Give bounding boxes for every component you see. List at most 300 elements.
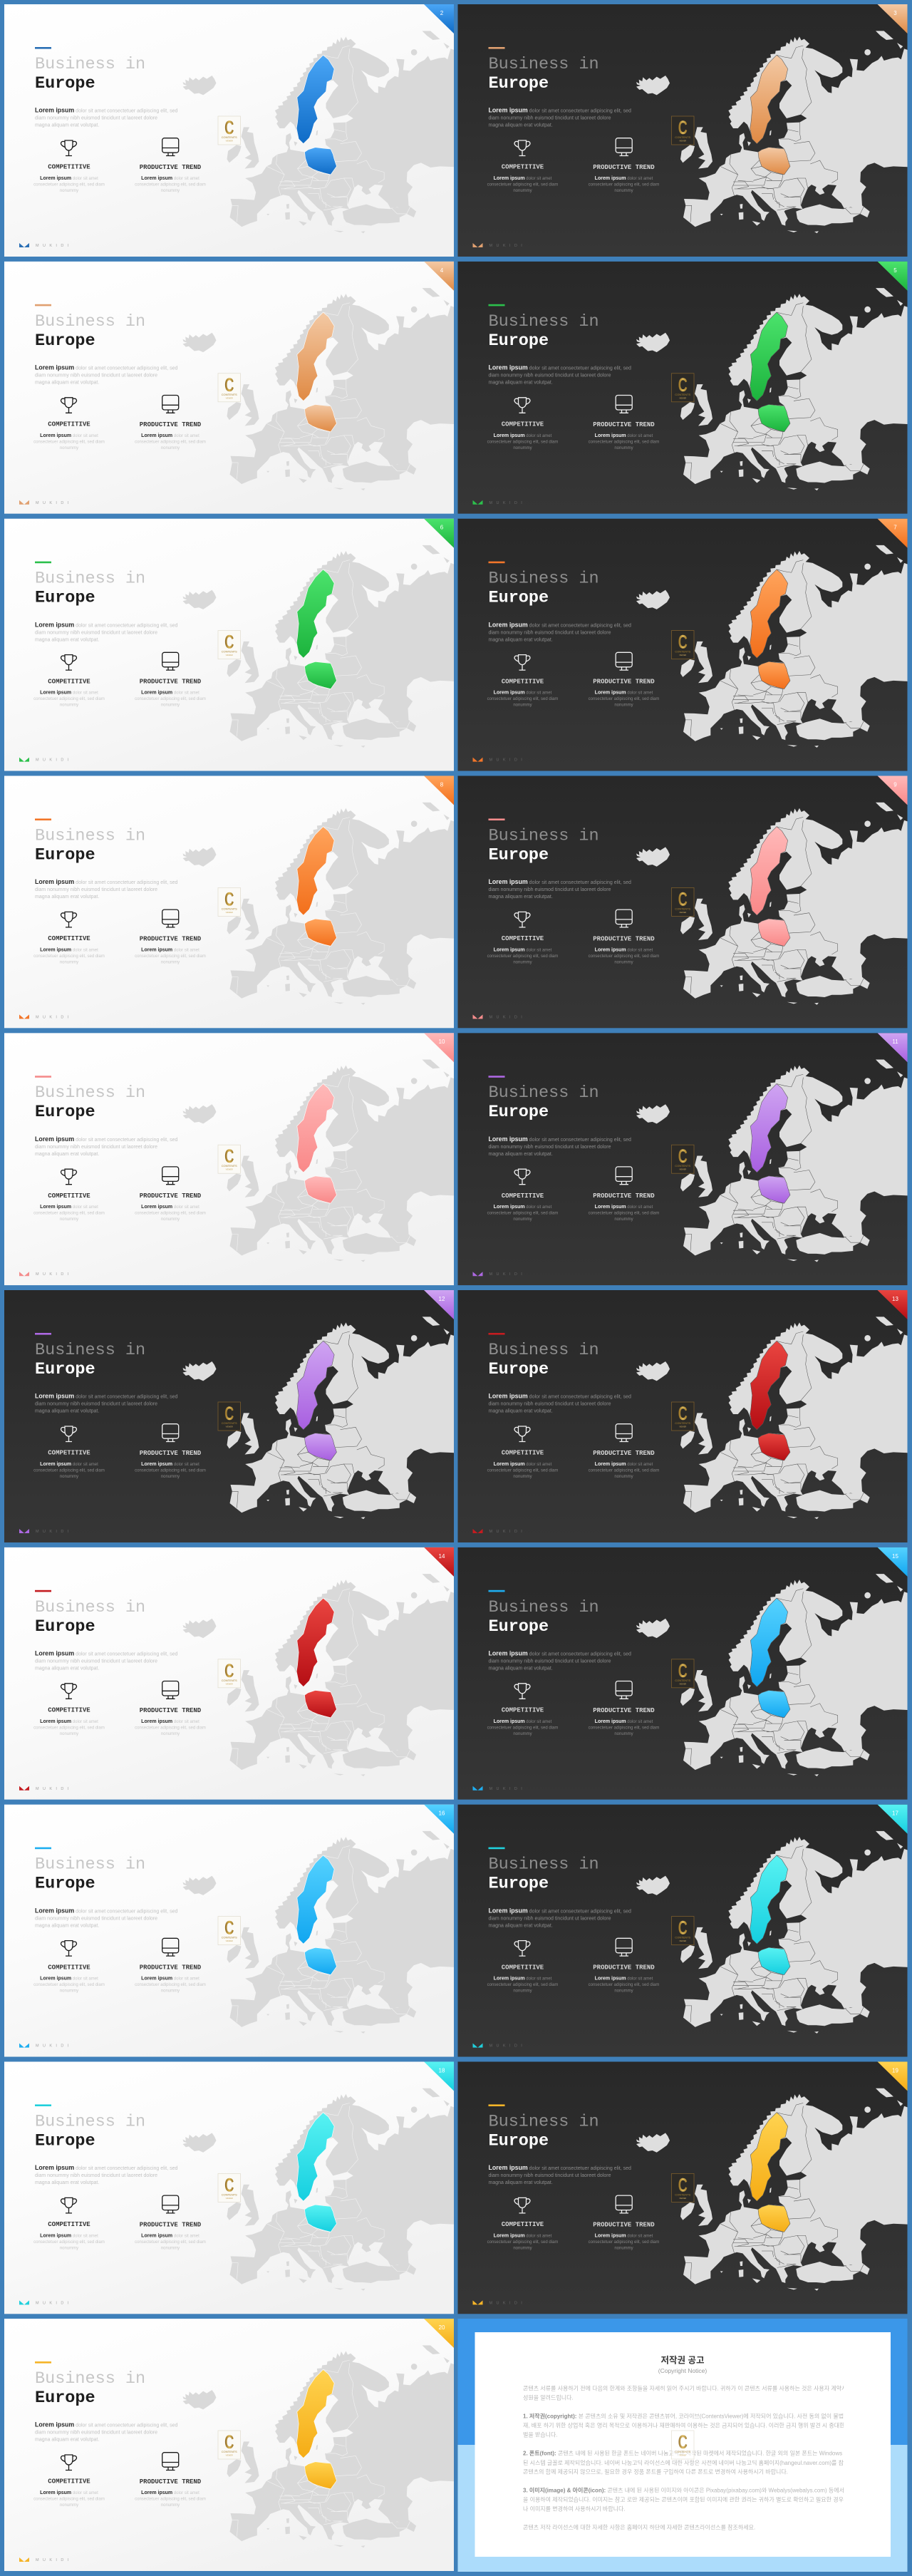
block: productive trend: PRODUCTIVE TREND [140,2478,202,2485]
block: productive trend: Lorem ipsum dolor sit amet [141,1719,200,1724]
notice body text: 나 이미지를 변경하여 사용하시기 바랍니다. [523,2505,626,2512]
badge: contents logo: C [678,1917,688,1938]
block: productive trend: consectetuer adipiscing elit, sed diam [135,1983,206,1987]
badge: contents logo [671,631,694,659]
badge: contents logo: C [678,631,688,652]
brand logo [19,758,73,763]
brand logo: MUKIDI [36,1015,73,1019]
block: productive trend: PRODUCTIVE TREND [140,679,202,686]
map of Europe with Sweden and Poland highlighted [636,288,909,490]
accent bar [35,1590,51,1592]
corner tab with page number [424,776,454,805]
map of Europe with Sweden and Poland highlighted [636,803,909,1005]
block: competitive: COMPETITIVE [502,164,544,171]
corner tab with page number [878,776,908,805]
title: Europe [35,1103,95,1122]
title: Business in [35,1083,145,1103]
brand logo [473,1529,526,1534]
block: competitive: nonummy [513,446,532,450]
corner tab with page number [424,1805,454,1834]
block: competitive: COMPETITIVE [48,1964,90,1971]
notice body text: 재, 배포 하기 위한 상업적 혹은 영리 목적으로 이용하거나 재판매하여 이용하는 것은 금지되어 있습니다. 이러한 금지 행위 발견 시 중대한 민사 및 형사상의 처벌이 [523,2421,903,2428]
block: competitive [487,421,558,450]
block: productive trend: consectetuer adipiscing elit, sed diam [135,1468,206,1473]
block: productive trend: Lorem ipsum dolor sit amet [141,2233,200,2238]
title [489,312,599,351]
block: productive trend: Lorem ipsum dolor sit amet [595,1462,653,1467]
accent bar [489,818,504,820]
block: productive trend: Lorem ipsum dolor sit amet [141,1977,200,1982]
title [35,1598,145,1637]
corner tab with page number [878,2061,908,2091]
title: Europe [489,845,549,865]
corner tab with page number [424,2319,454,2348]
title: Business in [489,1083,599,1103]
block: productive trend: nonummy [614,1217,633,1222]
title [489,56,597,91]
notice body text: 2. 폰트(font): 콘텐츠 내에 된 사용된 한글 폰트는 네이버 나눔고딕과 저작된 마켓에서 제작되었습니다. 한글 외의 일본 폰트는 Windows System에 포함된 [523,2450,886,2457]
icon: monitor [162,138,179,155]
title [35,826,145,865]
block: productive trend: nonummy [161,960,180,964]
block: competitive: consectetuer adipiscing elit, sed diam [487,440,558,444]
block: competitive: Lorem ipsum dolor sit amet [40,1719,98,1724]
block: competitive: consectetuer adipiscing elit, sed diam [33,2498,105,2502]
title: Business in [35,1598,145,1617]
block: productive trend: nonummy [161,1217,180,1222]
block: competitive: COMPETITIVE [502,1707,544,1714]
panel: slide 2 light blue [4,4,455,257]
block: competitive [487,2221,558,2250]
badge: contents logo: C [678,116,688,138]
block: competitive: COMPETITIVE [48,1192,90,1200]
badge: contents logo: CONTENTS [222,1936,237,1939]
title: Europe [489,1875,549,1894]
icon: trophy [61,140,76,155]
brand logo [473,1014,526,1019]
corner tab with page number [424,4,454,34]
badge: contents logo: C [224,1659,234,1681]
block: productive trend: Lorem ipsum dolor sit amet [595,947,653,952]
paragraph: magna aliquam erat volutpat. [35,123,99,128]
badge: contents logo: CONTENTS [222,2450,237,2453]
icon: trophy [61,1684,76,1699]
brand logo [19,500,68,505]
corner tab with page number [424,519,454,548]
block: competitive: Lorem ipsum dolor sit amet [494,433,552,438]
panel: slide 4 light peach [4,262,455,514]
badge: contents logo: VIEWER [226,396,233,399]
badge: contents logo: CONTENTS [675,2450,691,2453]
paragraph: diam nonummy nibh euismod tincidunt ut laoreet dolore [489,116,611,121]
block: productive trend: Lorem ipsum dolor sit amet [141,691,200,696]
block: competitive: nonummy [513,1989,532,1994]
block: competitive: Lorem ipsum dolor sit amet [40,1977,98,1982]
title: Europe [489,1360,549,1379]
badge: contents logo: CONTENTS [222,650,237,654]
badge: contents logo: C [224,2431,234,2453]
paragraph: diam nonummy nibh euismod tincidunt ut laoreet dolore [35,2173,157,2178]
icon: monitor [616,1938,632,1956]
paragraph [489,1393,631,1414]
corner tab with page number: 19 [892,2067,898,2073]
badge: contents logo: CONTENTS [675,2193,691,2196]
paragraph: Lorem ipsum dolor sit amet consectetuer adipiscing elit, sed [35,1650,177,1657]
block: competitive: COMPETITIVE [48,421,90,428]
paragraph: Lorem ipsum dolor sit amet consectetuer adipiscing elit, sed [489,2164,631,2171]
paragraph [489,1135,631,1157]
block: productive trend: PRODUCTIVE TREND [140,1964,202,1972]
badge: contents logo [218,887,241,916]
title: Europe [35,74,95,93]
block: productive trend: nonummy [161,1732,180,1736]
corner tab with page number: 16 [439,1810,445,1817]
corner tab with page number [424,1547,454,1577]
notice body text: 1. 저작권(copyright): 본 콘텐츠의 소유 및 저작권은 콘텐츠뷰어, 코라이브(ContentsViewer)에 저작되어 있습니다. 사전 동의 없이 불법적 이용, 무단전재하는 [523,2412,896,2419]
badge: contents logo: VIEWER [226,140,233,143]
block: productive trend: consectetuer adipiscing elit, sed diam [135,182,206,187]
block: competitive: consectetuer adipiscing elit, sed diam [33,182,105,187]
block: competitive: COMPETITIVE [502,1964,544,1971]
brand logo [19,2557,73,2562]
icon: trophy [514,1684,530,1699]
badge: contents logo: VIEWER [679,1682,686,1685]
badge: contents logo: C [678,1145,688,1167]
badge: contents logo: CONTENTS [222,2193,237,2196]
title: Europe [35,1617,95,1637]
block: productive trend: Lorem ipsum dolor sit amet [141,1462,200,1467]
block: competitive: nonummy [60,1217,78,1222]
paragraph: Lorem ipsum dolor sit amet consectetuer adipiscing elit, sed [489,621,631,628]
brand logo: MUKIDI [36,2558,73,2562]
block: productive trend: PRODUCTIVE TREND [593,1707,655,1714]
paragraph [35,1135,177,1157]
block: competitive: consectetuer adipiscing elit, sed diam [33,1212,105,1216]
brand logo [473,2300,526,2305]
brand logo [19,2044,73,2049]
badge: contents logo: C [224,631,234,652]
block: productive trend [589,2221,659,2250]
block: competitive: Lorem ipsum dolor sit amet [40,176,98,181]
paragraph: magna aliquam erat volutpat. [35,1923,99,1928]
paragraph [35,878,177,900]
notice body text: 을 이용하여 제작되었습니다. 이미지는 참고 로만 제공되는 콘텐츠이며 포함된 이미지에 관한 권리는 귀하가 별도로 확인하고 필요한 경우 여기를 삭제하거나 다른 [523,2496,901,2503]
block: competitive: COMPETITIVE [48,1707,90,1714]
block: competitive: nonummy [60,189,78,193]
corner tab with page number [878,262,908,291]
brand logo: MUKIDI [489,1530,526,1534]
paragraph: Lorem ipsum dolor sit amet consectetuer adipiscing elit, sed [35,1907,177,1914]
badge: contents logo: CONTENTS [675,1936,691,1939]
icon: monitor [162,1424,179,1441]
badge: contents logo: VIEWER [226,1682,233,1685]
block: productive trend [135,679,206,708]
paragraph: diam nonummy nibh euismod tincidunt ut laoreet dolore [35,116,157,121]
badge: contents logo: VIEWER [226,2197,233,2200]
badge: contents logo: VIEWER [226,2453,233,2456]
block: competitive [33,2221,105,2250]
block: productive trend [135,164,206,193]
badge: contents logo: CONTENTS [222,393,237,396]
badge: contents logo: C [224,888,234,910]
block: competitive: Lorem ipsum dolor sit amet [494,1719,552,1724]
block: competitive: nonummy [60,2246,78,2250]
block: productive trend: nonummy [614,1989,633,1994]
badge: contents logo: C [678,1659,688,1681]
paragraph: magna aliquam erat volutpat. [35,1152,99,1157]
block: productive trend: nonummy [614,1732,633,1736]
block: productive trend: nonummy [161,1475,180,1479]
corner tab with page number: 12 [439,1296,445,1302]
badge: contents logo [671,116,694,145]
block: productive trend: nonummy [161,1989,180,1994]
accent bar [489,1848,504,1849]
block: competitive [33,2478,105,2508]
icon: trophy [514,1169,530,1185]
title [489,570,599,608]
block: productive trend: nonummy [614,446,633,450]
paragraph: magna aliquam erat volutpat. [35,2180,99,2185]
badge: contents logo: CONTENTS [222,1679,237,1682]
title: Business in [489,1855,599,1875]
corner tab with page number [424,1033,454,1062]
panel: slide 19 dark yellow [457,2061,909,2314]
block: competitive: COMPETITIVE [48,1450,90,1457]
accent bar [35,47,51,49]
icon: trophy [61,655,76,670]
accent bar [35,2361,51,2364]
block: productive trend: Lorem ipsum dolor sit amet [595,176,653,181]
corner tab with page number: 15 [892,1553,898,1560]
block: competitive: Lorem ipsum dolor sit amet [494,947,552,952]
paragraph: magna aliquam erat volutpat. [489,1152,553,1157]
paragraph [35,1649,177,1671]
map of Europe with Sweden and Poland highlighted [183,1060,455,1262]
brand logo [473,500,526,505]
block: competitive: Lorem ipsum dolor sit amet [40,433,98,438]
block: productive trend: consectetuer adipiscing elit, sed diam [135,2498,206,2502]
block: productive trend: Lorem ipsum dolor sit amet [595,1977,653,1982]
paragraph: diam nonummy nibh euismod tincidunt ut laoreet dolore [489,2173,611,2178]
block: productive trend: nonummy [614,960,633,964]
accent bar [489,1590,504,1592]
block: competitive: Lorem ipsum dolor sit amet [494,2233,552,2238]
block: competitive: Lorem ipsum dolor sit amet [40,2490,98,2495]
corner tab with page number: 4 [440,267,444,274]
paragraph: magna aliquam erat volutpat. [489,1666,553,1671]
panel: slide 14 light red [4,1547,455,1800]
paragraph: diam nonummy nibh euismod tincidunt ut laoreet dolore [489,1145,611,1150]
brand logo [473,243,522,247]
badge: contents logo: VIEWER [679,1939,686,1942]
badge: contents logo [218,1659,241,1688]
block: competitive: nonummy [60,2503,78,2508]
block: productive trend: PRODUCTIVE TREND [140,164,202,171]
block: competitive: COMPETITIVE [48,164,90,171]
paragraph: Lorem ipsum dolor sit amet consectetuer adipiscing elit, sed [35,2421,177,2428]
icon: trophy [61,2455,76,2471]
brand logo: MUKIDI [489,501,526,505]
corner tab with page number: 14 [439,1553,445,1560]
brand logo: MUKIDI [489,1015,526,1019]
icon: monitor [616,1681,632,1699]
badge: contents logo: VIEWER [226,1168,233,1171]
icon: monitor [162,1167,179,1185]
corner tab with page number: 9 [893,781,897,788]
map of Europe with Sweden and Poland highlighted [183,545,455,748]
block: productive trend: Lorem ipsum dolor sit amet [141,176,200,181]
accent bar [489,47,504,49]
block: productive trend: nonummy [614,189,633,193]
title: Business in [489,570,599,589]
block: competitive: COMPETITIVE [502,1450,544,1457]
badge: contents logo [218,1402,241,1431]
block: productive trend [135,2478,206,2508]
badge: contents logo: CONTENTS [675,907,691,910]
paragraph: Lorem ipsum dolor sit amet consectetuer adipiscing elit, sed [35,2164,177,2171]
title [35,1855,145,1894]
badge: contents logo: VIEWER [679,911,686,914]
corner tab with page number: 10 [439,1039,445,1045]
title: Business in [489,1341,599,1360]
icon: trophy [61,2198,76,2213]
block: competitive [33,1450,105,1479]
block: productive trend: Lorem ipsum dolor sit amet [595,2233,653,2238]
panel: slide 10 light pink [4,1033,455,1285]
title: Europe [35,331,95,351]
paragraph: diam nonummy nibh euismod tincidunt ut laoreet dolore [35,1659,157,1664]
block: productive trend: nonummy [161,2246,180,2250]
badge: contents logo: C [224,2174,234,2195]
brand logo [19,1014,73,1019]
badge: contents logo [671,1917,694,1945]
block: competitive: COMPETITIVE [48,2478,90,2485]
corner tab with page number [878,519,908,548]
paragraph [35,364,177,385]
notice title: 저작권 공고 [661,2355,704,2365]
notice body text [523,2385,910,2530]
paragraph: magna aliquam erat volutpat. [489,1923,553,1928]
paragraph [489,1649,631,1671]
block: competitive: Lorem ipsum dolor sit amet [40,947,98,952]
panel: slide 8 light orange [4,776,455,1028]
title: Business in [35,2369,145,2389]
accent bar [489,1076,504,1078]
badge: contents logo [671,2431,694,2459]
block: competitive: nonummy [60,446,78,450]
block: competitive: consectetuer adipiscing elit, sed diam [487,182,558,187]
block: competitive [33,935,105,964]
brand logo: MUKIDI [36,1272,73,1277]
badge: contents logo: C [224,1145,234,1167]
block: competitive: nonummy [60,1732,78,1736]
accent bar [489,1333,504,1335]
block: competitive: consectetuer adipiscing elit, sed diam [33,440,105,444]
paragraph: magna aliquam erat volutpat. [35,380,99,385]
paragraph: diam nonummy nibh euismod tincidunt ut laoreet dolore [35,1402,157,1407]
paragraph: magna aliquam erat volutpat. [35,1666,99,1671]
paragraph [35,1907,177,1928]
block: productive trend [135,1964,206,1994]
corner tab with page number: 3 [893,10,897,16]
badge: contents logo: C [224,373,234,396]
paragraph [35,1393,177,1414]
block: competitive: consectetuer adipiscing elit, sed diam [487,2240,558,2245]
paragraph [35,107,177,128]
panel: slide 6 light green [4,519,455,771]
block: competitive [487,1450,558,1479]
badge: contents logo: CONTENTS [675,135,691,139]
brand logo [19,1786,73,1791]
paragraph: Lorem ipsum dolor sit amet consectetuer adipiscing elit, sed [489,107,631,114]
panel: slide 17 dark teal [457,1805,909,2057]
badge: contents logo [671,1145,694,1173]
icon: monitor [162,2453,179,2471]
panel: slide 3 dark peach [457,4,909,257]
paragraph: Lorem ipsum dolor sit amet consectetuer adipiscing elit, sed [489,1650,631,1657]
title: Europe [489,74,549,93]
badge: contents logo [671,1402,694,1431]
badge: contents logo: CONTENTS [675,1679,691,1682]
brand logo [473,758,526,763]
block: competitive: COMPETITIVE [48,678,90,685]
map of Europe with Sweden and Poland highlighted [636,1831,909,2034]
badge: contents logo: C [678,373,688,396]
block: competitive: COMPETITIVE [502,935,544,942]
paragraph: diam nonummy nibh euismod tincidunt ut laoreet dolore [35,887,157,892]
badge: contents logo: VIEWER [226,911,233,914]
block: productive trend: Lorem ipsum dolor sit amet [141,1205,200,1210]
corner tab with page number: 13 [892,1296,898,1302]
title: Europe [489,589,549,608]
notice title [658,2355,707,2374]
accent bar [35,1848,51,1849]
icon: monitor [162,1938,179,1956]
block: competitive: COMPETITIVE [48,935,90,942]
block: competitive: consectetuer adipiscing elit, sed diam [33,954,105,959]
title [35,1341,145,1379]
badge: contents logo: VIEWER [679,2197,686,2200]
paragraph: Lorem ipsum dolor sit amet consectetuer adipiscing elit, sed [489,878,631,885]
paragraph: diam nonummy nibh euismod tincidunt ut laoreet dolore [489,373,611,378]
map of Europe with Sweden and Poland highlighted [636,1574,909,1776]
panel: slide 7 dark orange [457,519,909,771]
notice body text: 콘텐츠 저작 라이선스에 대한 자세한 사항은 홈페이지 하단에 자세한 콘텐츠라이선스를 참조하세요. [523,2523,755,2530]
block: competitive: Lorem ipsum dolor sit amet [494,691,552,696]
paragraph [489,1907,631,1928]
title: Business in [35,1855,145,1875]
panel: slide 20 light yellow [4,2319,455,2571]
corner tab with page number [878,1547,908,1577]
paragraph: magna aliquam erat volutpat. [35,2438,99,2443]
brand logo: MUKIDI [489,1272,526,1277]
block: productive trend: PRODUCTIVE TREND [593,679,655,686]
brand logo [19,1272,73,1277]
block: competitive: nonummy [513,1217,532,1222]
block: productive trend [135,2221,206,2250]
icon: trophy [514,398,530,413]
block: productive trend: consectetuer adipiscing elit, sed diam [589,1983,659,1987]
title: Business in [489,312,599,331]
brand logo [473,1272,526,1277]
paragraph [489,107,631,128]
badge: contents logo: CONTENTS [675,1421,691,1425]
panel: slide 5 dark green [457,262,909,514]
block: productive trend [589,1964,659,1994]
block: productive trend [135,1707,206,1736]
title [489,2112,599,2150]
icon: trophy [514,2198,530,2213]
